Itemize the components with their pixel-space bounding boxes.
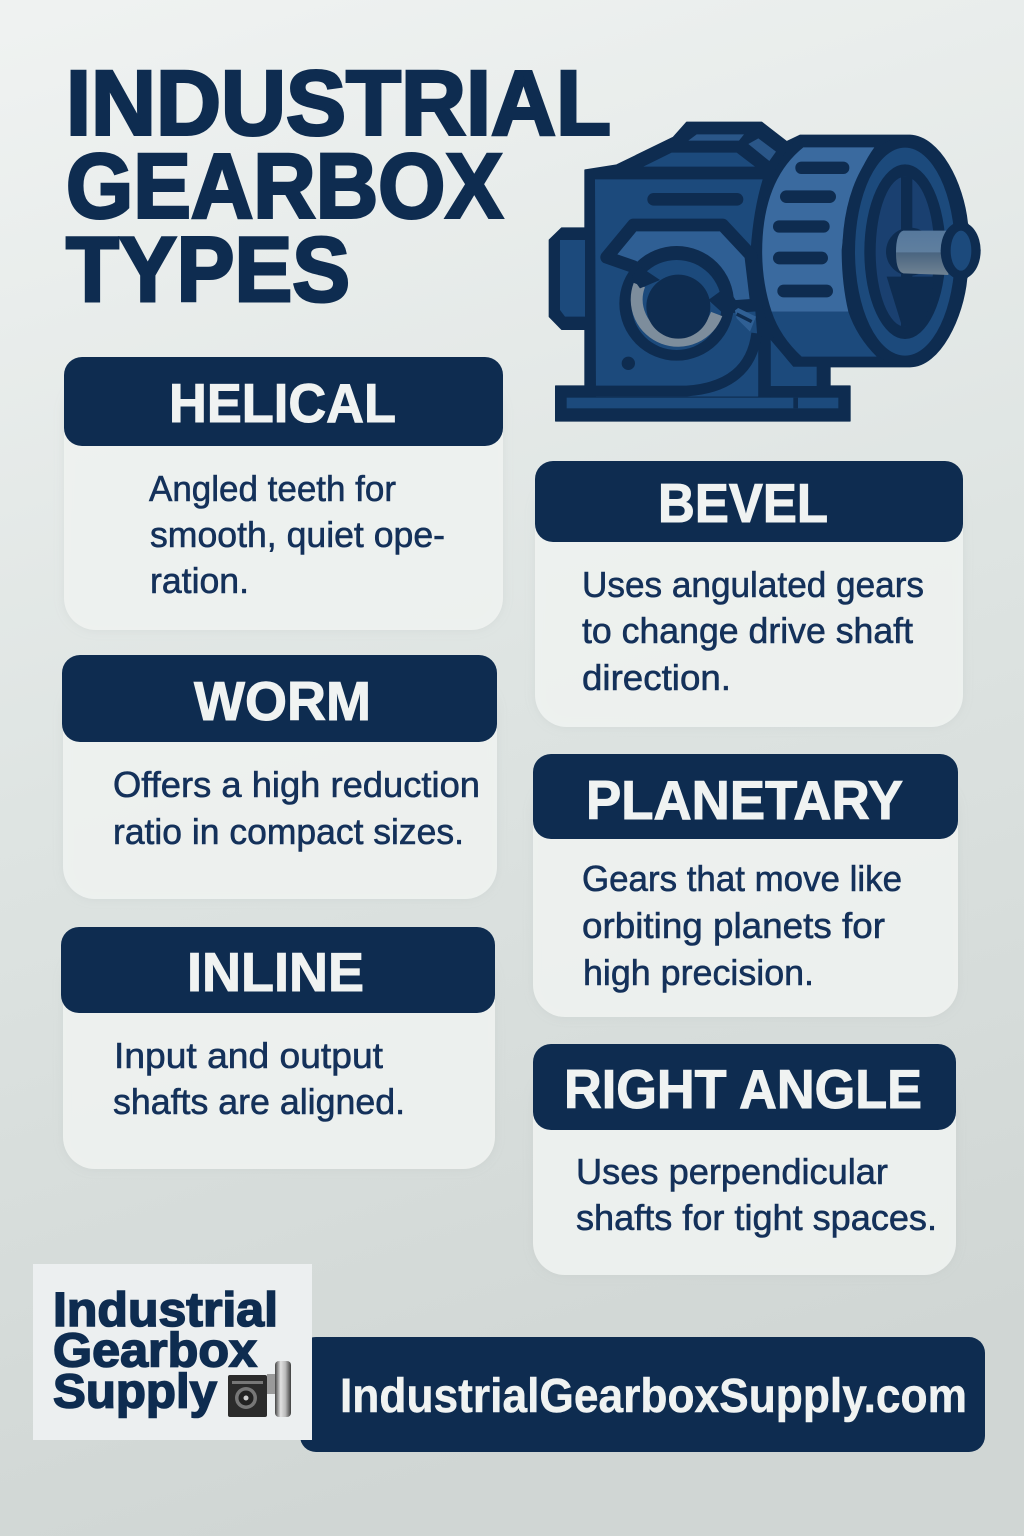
left flange [560,240,585,317]
motor band [758,135,910,367]
logo text [53,1284,278,1418]
text: worm description: Offers a high reduction [113,764,480,805]
panel: inline [61,927,495,1169]
title: INDUSTRIAL [66,52,611,154]
text: right angle description: shafts for tight spaces. [576,1197,937,1238]
text: planetary description: high precision. [583,952,814,993]
text: bevel description: Uses angulated gears [582,564,924,605]
heading: bevel [535,461,963,542]
text: planetary description [582,858,902,993]
text: helical description [149,468,445,601]
base junction [758,343,771,397]
panel: planetary [533,754,958,1017]
text: planetary description: Gears that move like [582,858,902,899]
logo panel [33,1264,312,1440]
text: bevel description: to change drive shaft [582,610,913,651]
text: helical description: Angled teeth for [149,468,396,509]
top cover [643,153,755,167]
text: helical description: ration. [150,560,249,601]
logo text: Supply [53,1366,217,1418]
panel: bevel [535,461,963,727]
logo text: Gearbox [53,1324,257,1378]
text: inline description: shafts are aligned. [113,1081,405,1122]
bearing ring [619,246,740,361]
motor vents [773,162,849,297]
icon: gearbox illustration [549,122,981,421]
text: bevel description: direction. [582,657,731,698]
panel: planetary: PLANETARY [586,769,903,831]
text: right angle description: Uses perpendicular [576,1151,888,1192]
text: right angle description [576,1151,937,1238]
inner hexagonal plate [607,225,757,307]
housing slot [647,193,743,206]
panel: helical: HELICAL [169,372,396,434]
heading: right angle [533,1044,956,1130]
panel: right angle [533,1044,956,1275]
housing lower curve [590,333,757,391]
panel: helical [64,357,503,630]
website banner [300,1337,985,1452]
icon: small gearbox photo [228,1361,291,1417]
base plate [556,397,850,421]
text: bevel description [582,564,924,698]
title: GEARBOX [66,136,503,238]
text: inline description [113,1035,405,1122]
heading: planetary [533,754,958,839]
text: planetary description: orbiting planets for [582,905,885,946]
housing rivet [622,357,635,370]
text: worm description [113,764,480,852]
heading: worm [62,655,497,742]
text: worm description: ratio in compact sizes. [113,811,464,852]
title [66,52,611,321]
panel: inline: INLINE [187,941,364,1003]
text: helical description: smooth, quiet ope- [150,514,445,555]
panel: bevel: BEVEL [658,472,828,534]
motor end cap [842,137,968,367]
heading: inline [61,927,495,1013]
website banner: IndustrialGearboxSupply.com [340,1370,967,1423]
logo text: Industrial [53,1284,278,1337]
housing right lower [771,340,817,386]
panel: right angle: RIGHT ANGLE [564,1058,922,1120]
panel: worm: WORM [194,670,371,732]
title: TYPES [66,219,350,321]
heading: helical [64,357,503,446]
panel: worm [62,655,497,899]
housing front [595,179,763,397]
output shaft [896,222,981,279]
text: inline description: Input and output [114,1035,383,1076]
gearbox silhouette [549,122,980,421]
